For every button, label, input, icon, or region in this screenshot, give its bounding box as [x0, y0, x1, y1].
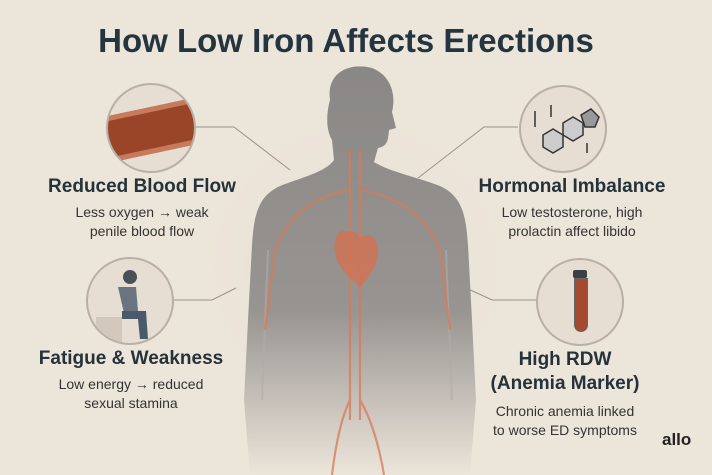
text: fatigue: sexual stamina	[84, 395, 178, 411]
text: hormonal: Hormonal Imbalance	[479, 176, 665, 197]
icon: test tube	[536, 258, 624, 346]
icon: molecule	[519, 85, 607, 173]
arm separation	[262, 250, 452, 400]
icon: blood vessel	[106, 83, 196, 173]
text: reduced blood flow: penile blood flow	[90, 223, 194, 239]
logo: allo	[662, 430, 691, 449]
text: high RDW: Chronic anemia linked	[496, 403, 634, 419]
text: hormonal: Low testosterone, high	[502, 204, 642, 220]
text: reduced blood flow: Less oxygen → weak	[75, 204, 209, 220]
text: hormonal: prolactin affect libido	[508, 223, 636, 239]
vessels and heart	[265, 150, 450, 475]
text: high RDW	[491, 349, 639, 438]
text: high RDW: (Anemia Marker)	[491, 373, 639, 394]
icon: fatigued person	[86, 257, 174, 345]
text: fatigue	[39, 348, 223, 411]
text: reduced blood flow: Reduced Blood Flow	[48, 176, 236, 197]
text: hormonal	[479, 176, 665, 239]
text: reduced blood flow	[48, 176, 236, 239]
title: How Low Iron Affects Erections	[98, 22, 594, 59]
text: high RDW: to worse ED symptoms	[493, 422, 637, 438]
connector lines	[171, 127, 536, 300]
text: fatigue: Low energy → reduced	[59, 376, 203, 392]
silhouette	[244, 66, 476, 475]
text: high RDW: High RDW	[519, 349, 611, 370]
text: fatigue: Fatigue & Weakness	[39, 348, 223, 369]
